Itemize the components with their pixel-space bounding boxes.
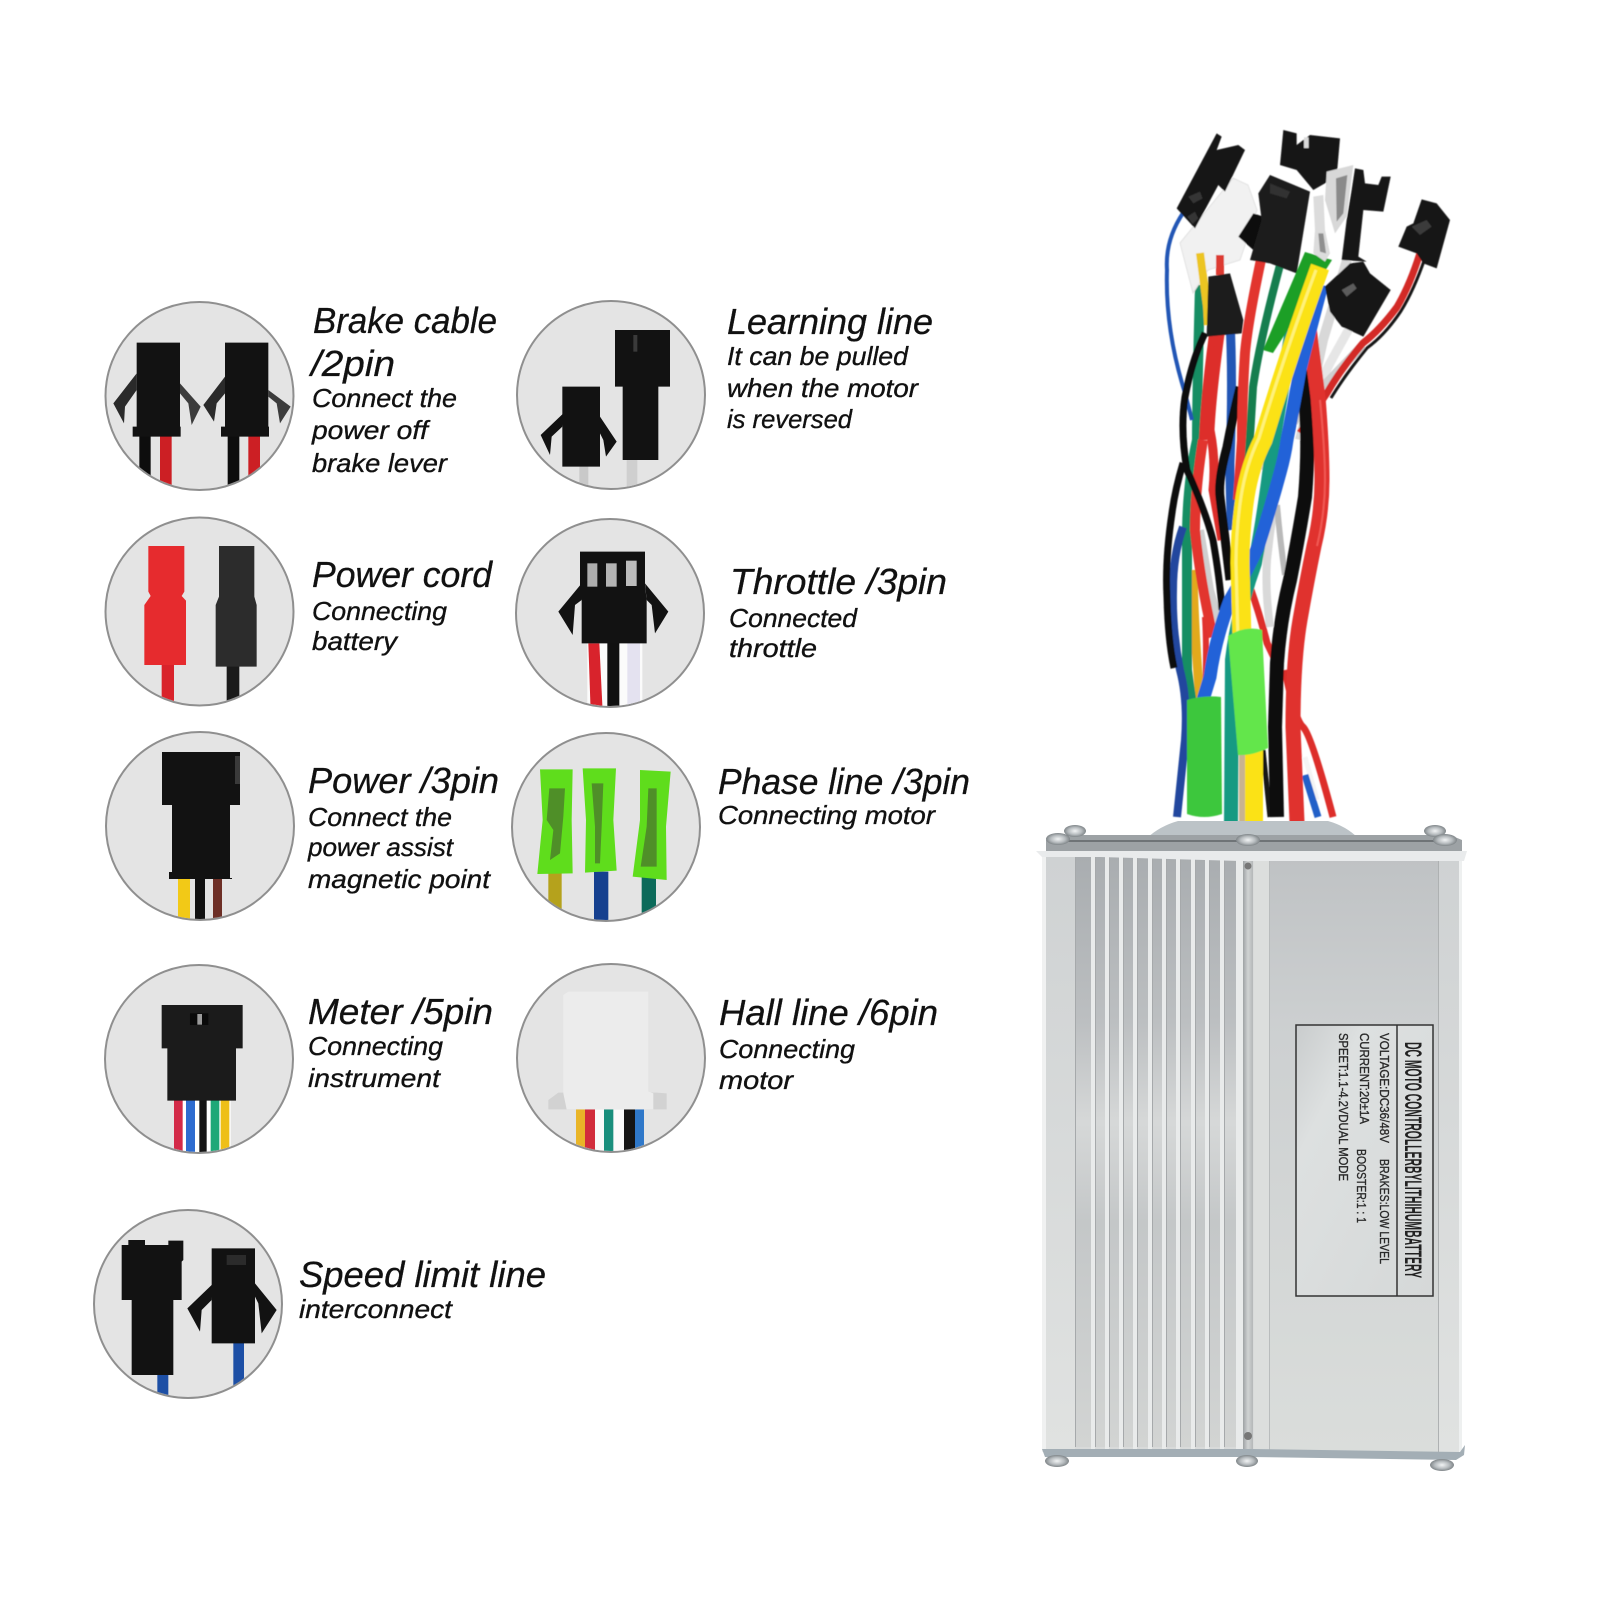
- panel: speed limit line: [94, 1210, 546, 1403]
- text: hall line description: motor: [719, 1065, 794, 1095]
- yellow lower wire: [1245, 748, 1263, 824]
- heading: speed limit line: Speed limit line: [299, 1254, 546, 1295]
- spec label: SPEET:1.1-4.2VDUAL MODE: [1336, 1033, 1351, 1181]
- icon: throttle connector: [516, 519, 704, 712]
- icon: hall line connector: [517, 964, 705, 1155]
- icon: speed limit connectors: [94, 1210, 282, 1403]
- left green sleeve: [1187, 696, 1222, 817]
- green flat sleeve: [1263, 252, 1332, 353]
- text: learning line description: It can be pulled: [727, 341, 910, 371]
- spec label: BOOSTER:1 : 1: [1354, 1149, 1369, 1223]
- icon: phase line terminals: [512, 733, 700, 925]
- wire bundle: [1167, 130, 1450, 824]
- text: speed limit description: interconnect: [299, 1294, 454, 1324]
- text: learning line description: is reversed: [727, 404, 854, 434]
- icon: meter connector: [105, 965, 293, 1157]
- text: meter description: [308, 1031, 444, 1093]
- yellow thick wire: [1236, 267, 1320, 640]
- text: learning line description: when the motor: [727, 373, 919, 403]
- screws: [1045, 825, 1457, 1471]
- text: throttle description: Connected: [729, 603, 859, 633]
- heading: learning line: Learning line: [727, 301, 933, 342]
- black plug connectors: [1177, 130, 1450, 337]
- heading: brake cable: /2pin: [308, 343, 395, 384]
- panel: power 3pin: [106, 732, 499, 925]
- panel: power cord: [106, 518, 493, 707]
- text: meter description: instrument: [308, 1063, 442, 1093]
- panel: hall line 6pin: [517, 964, 938, 1155]
- text: learning line description: [727, 341, 919, 434]
- controller housing: [1036, 821, 1467, 1471]
- panel: phase line 3pin: [512, 733, 970, 925]
- text: brake cable description: Connect the: [312, 383, 457, 413]
- text: brake cable description: [311, 383, 457, 478]
- text: brake cable description: brake lever: [312, 448, 448, 478]
- text: hall line description: [719, 1034, 856, 1095]
- spec label: VOLTAGE:DC36/48V: [1377, 1033, 1392, 1143]
- controller product: [1036, 130, 1467, 1471]
- text: power 3pin description: magnetic point: [308, 864, 492, 894]
- text: brake cable description: power off: [311, 415, 431, 445]
- spec label: CURRENT:20±1A: [1357, 1033, 1372, 1124]
- heading: brake cable: Brake cable: [313, 300, 497, 341]
- collar: [1147, 821, 1358, 842]
- heading: phase line 3pin: Phase line /3pin: [718, 761, 970, 802]
- text: power 3pin description: Connect the: [308, 802, 452, 832]
- text: power cord description: [312, 596, 448, 656]
- text: power cord description: Connecting: [312, 596, 448, 626]
- spec label: [1296, 1025, 1433, 1296]
- text: power 3pin description: power assist: [307, 832, 455, 862]
- controller housing: DC MOTO CONTROLLERBYLITHIHUMBATTERY: [1399, 1042, 1426, 1278]
- text: power cord description: battery: [312, 626, 399, 656]
- text: power 3pin description: [307, 802, 492, 894]
- icon: power 3pin connector: [106, 732, 294, 925]
- text: throttle description: [729, 603, 859, 663]
- panel: learning line: [517, 301, 933, 492]
- icon: power cord connectors: [106, 518, 294, 707]
- panel: throttle 3pin: [516, 519, 947, 712]
- panel: brake cable: [106, 300, 497, 490]
- icon: brake cable connectors: [106, 302, 294, 490]
- heading: meter 5pin: Meter /5pin: [308, 991, 493, 1032]
- bottom rail: [1042, 1445, 1465, 1460]
- green heat-shrink sleeve: [1228, 628, 1268, 755]
- spec label: BRAKES:LOW LEVEL: [1377, 1159, 1392, 1264]
- heading: hall line 6pin: Hall line /6pin: [719, 992, 938, 1033]
- heading: power cord: Power cord: [312, 554, 493, 595]
- text: phase line description: Connecting motor: [718, 800, 936, 830]
- metal terminals: [1313, 165, 1353, 262]
- panel: meter 5pin: [105, 965, 493, 1157]
- white six-pin connector: [1180, 178, 1257, 293]
- text: meter description: Connecting: [308, 1031, 444, 1061]
- right panel: [1254, 857, 1438, 1452]
- text: hall line description: Connecting: [719, 1034, 856, 1064]
- top plate and flange: [1046, 835, 1462, 851]
- heading: power 3pin: Power /3pin: [308, 760, 499, 801]
- heat sink fins: [1075, 857, 1253, 1449]
- text: throttle description: throttle: [729, 633, 817, 663]
- heading: brake cable: [308, 300, 497, 384]
- icon: learning line connectors: [517, 301, 705, 492]
- heading: throttle 3pin: Throttle /3pin: [730, 561, 947, 602]
